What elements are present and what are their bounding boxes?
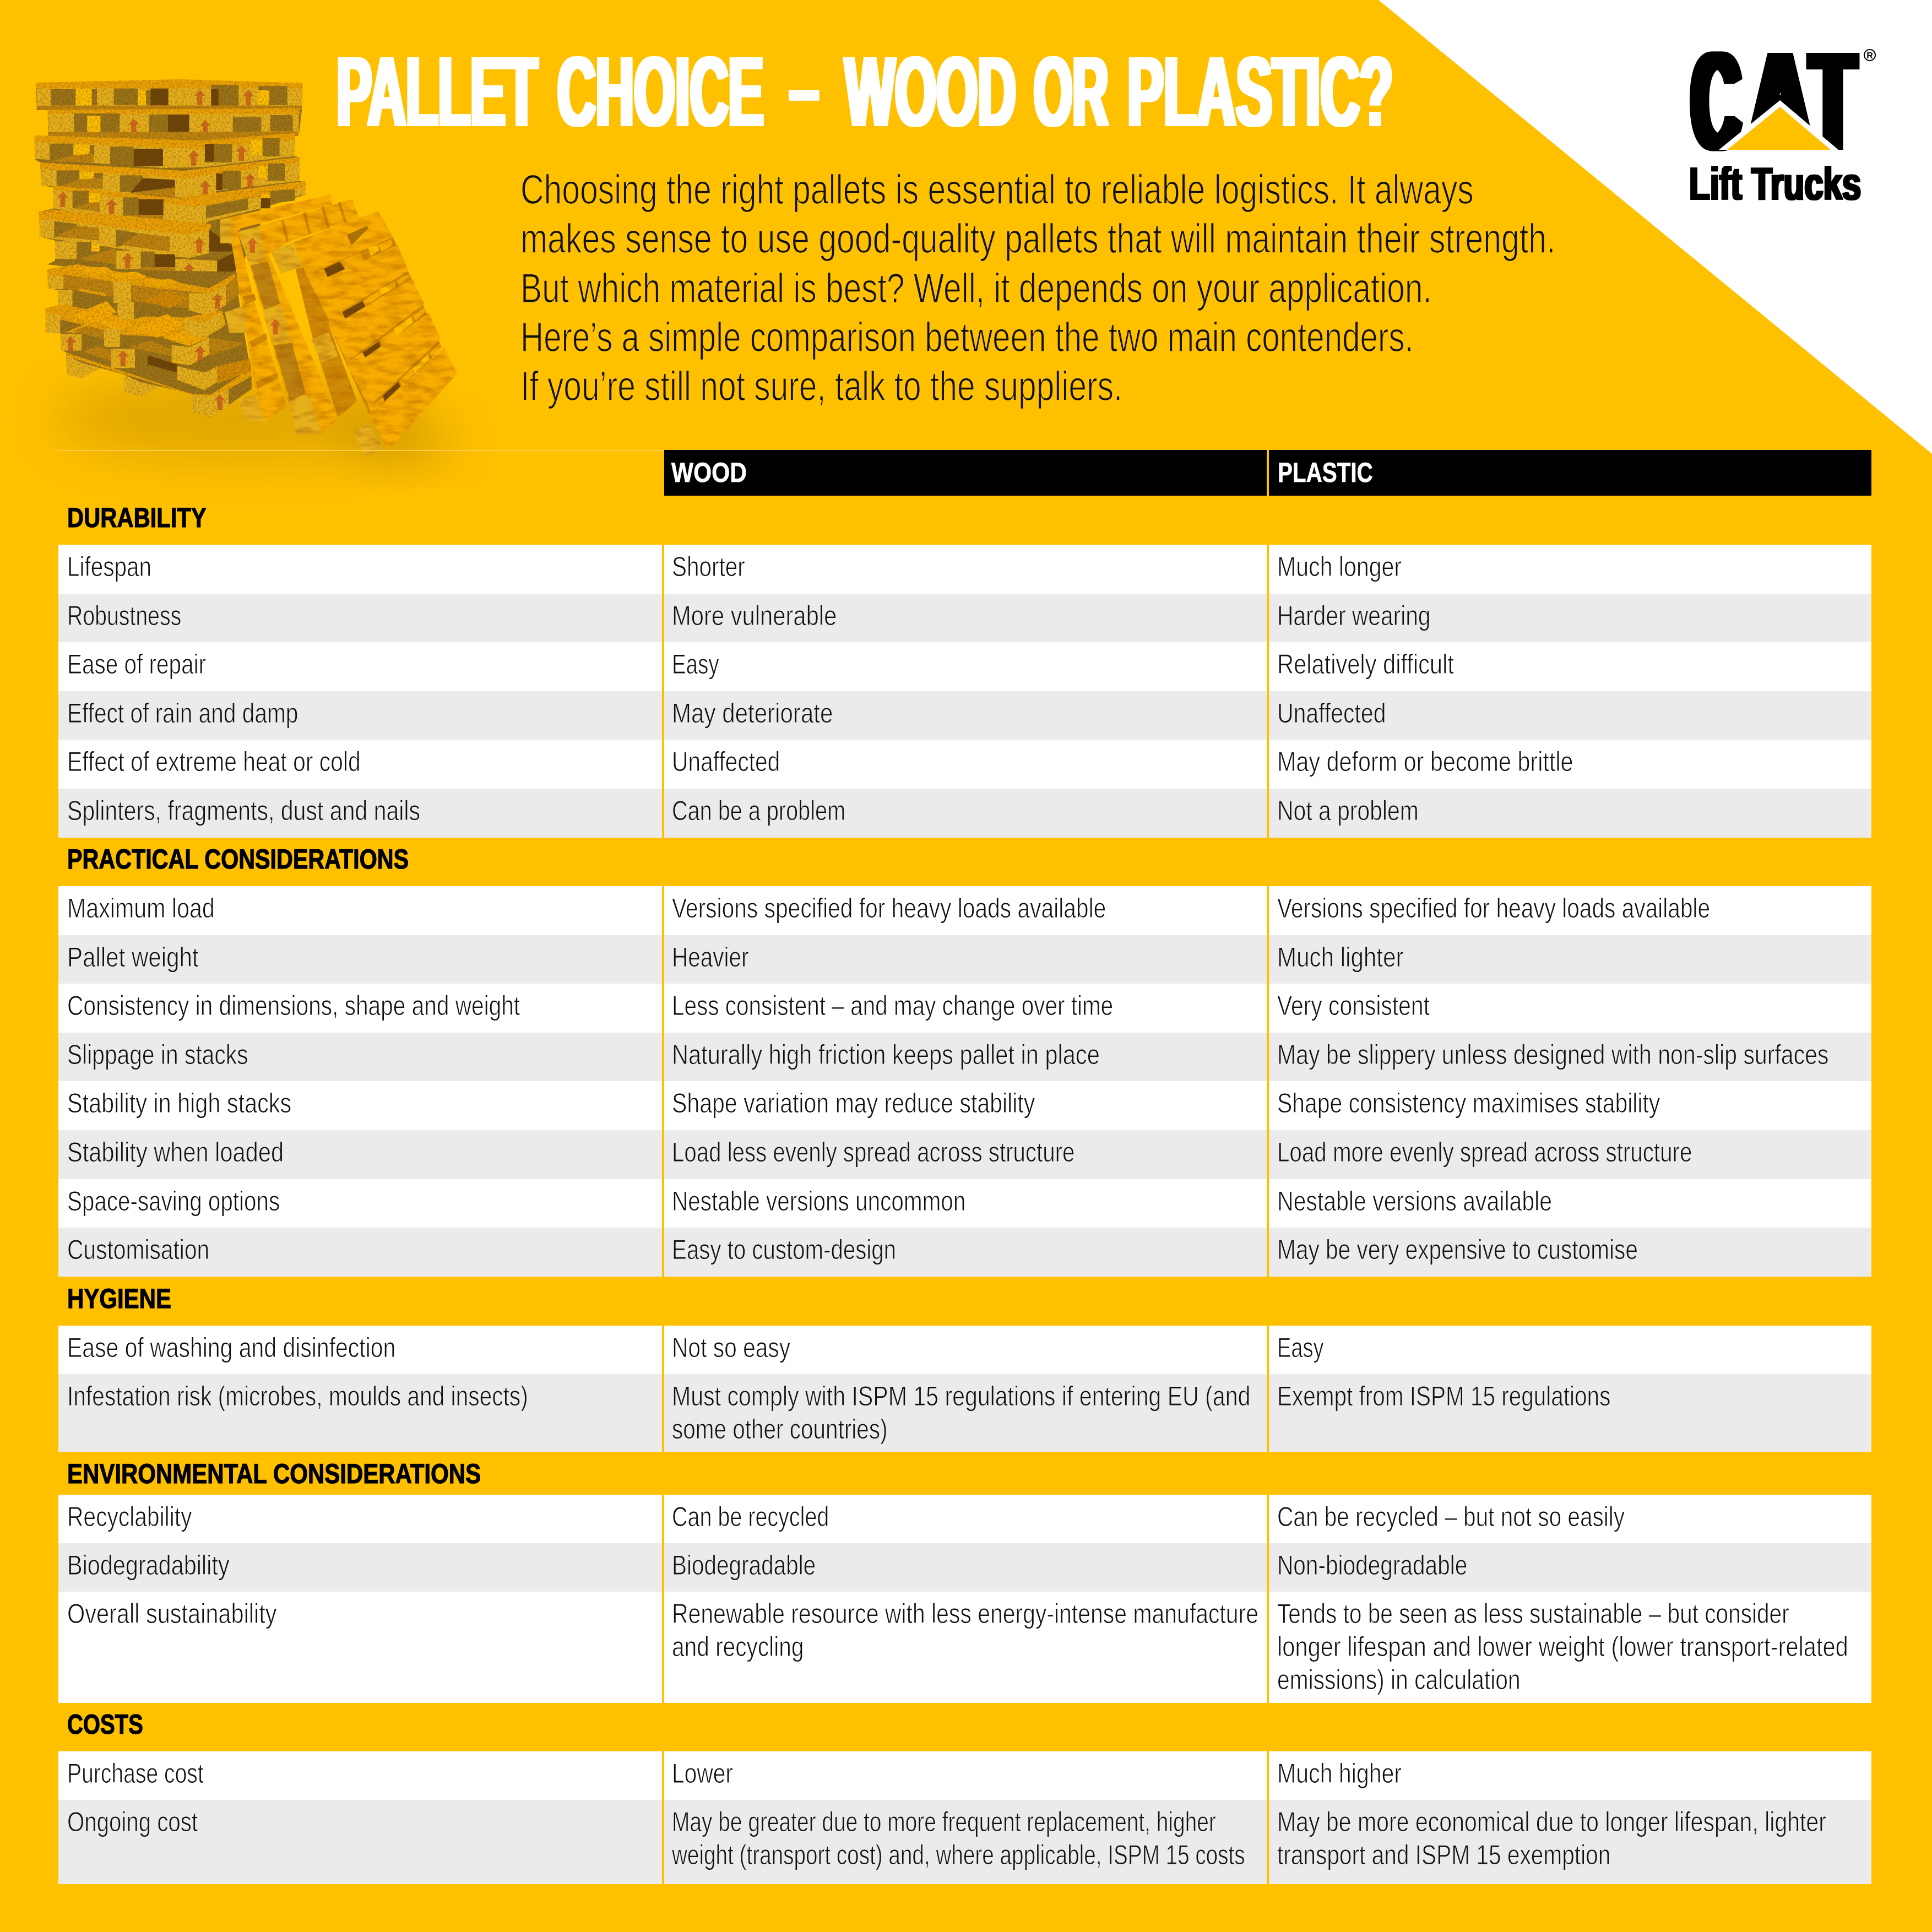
row: pallet weight: Heavier (672, 942, 749, 973)
row: stability in high stacks: Shape consistency maximises stability (1277, 1088, 1660, 1119)
row: effect of rain and damp (58, 691, 1871, 740)
row: overall sustainability: Renewable resource with less energy-intense manufacture (672, 1598, 1258, 1629)
row: ongoing cost: transport and ISPM 15 exemption (1277, 1839, 1610, 1870)
intro text: Here’s a simple comparison between the two main contenders. (520, 314, 1414, 361)
title: PLASTIC? (1127, 36, 1393, 146)
row: ongoing cost: weight (transport cost) and, where applicable, ISPM 15 costs (671, 1840, 1245, 1870)
row: ease of repair: Relatively difficult (1277, 648, 1454, 680)
row: robustness (58, 594, 1871, 642)
row: effect of extreme heat or cold: Effect of extreme heat or cold (67, 746, 361, 777)
row: slippage in stacks: May be slippery unless designed with non-slip surfaces (1277, 1039, 1828, 1070)
row: robustness: More vulnerable (672, 600, 837, 631)
title: – (789, 33, 819, 143)
row: stability when loaded: Load less evenly spread across structure (672, 1137, 1074, 1168)
row: lifespan: Much longer (1277, 551, 1402, 582)
row: maximum load (58, 886, 1871, 935)
row: effect of rain and damp: May deteriorate (672, 698, 833, 729)
intro text (520, 167, 1555, 410)
white corner triangle (1379, 0, 1932, 454)
row: ease of washing: Ease of washing and disinfection (67, 1332, 395, 1363)
title: OR (1034, 37, 1108, 147)
row: ongoing cost: May be greater due to more frequent replacement, higher (672, 1806, 1216, 1837)
row: effect of extreme heat or cold (58, 740, 1871, 789)
row: effect of rain and damp: Unaffected (1277, 698, 1386, 729)
row: pallet weight (58, 935, 1871, 984)
row: purchase cost (58, 1751, 1871, 1800)
row: infestation risk: Infestation risk (microbes, moulds and insects) (67, 1381, 528, 1412)
row: space-saving options: Space-saving options (67, 1186, 280, 1217)
intro text: But which material is best? Well, it depends on your application. (520, 265, 1432, 312)
row: consistency: Consistency in dimensions, shape and weight (67, 990, 520, 1021)
row: consistency: Less consistent – and may change over time (672, 990, 1113, 1021)
row: effect of extreme heat or cold: May deform or become brittle (1277, 746, 1573, 777)
intro text: Choosing the right pallets is essential to reliable logistics. It always (520, 167, 1474, 213)
row: overall sustainability: longer lifespan and lower weight (lower transport-related (1277, 1631, 1848, 1662)
title: WOOD (845, 37, 1016, 147)
title: PALLET (337, 37, 538, 147)
row: pallet weight: Much lighter (1277, 942, 1404, 973)
logo: Cat Lift Trucks: T (1810, 23, 1855, 179)
section heading: durability: DURABILITY (67, 502, 207, 533)
row: lifespan: Lifespan (67, 551, 151, 582)
row: ongoing cost: Ongoing cost (67, 1806, 198, 1837)
row: purchase cost: Much higher (1277, 1758, 1402, 1789)
intro text: If you’re still not sure, talk to the suppliers. (520, 363, 1122, 410)
row: biodegradability: Non-biodegradable (1277, 1550, 1467, 1581)
row: robustness: Robustness (67, 600, 181, 631)
row: customisation: Customisation (67, 1234, 209, 1265)
row: consistency: Very consistent (1277, 990, 1430, 1021)
row: customisation: Easy to custom-design (672, 1234, 896, 1265)
row: ease of washing: Not so easy (672, 1332, 790, 1363)
row: recyclability (58, 1495, 1871, 1543)
row: space-saving options: Nestable versions uncommon (672, 1186, 965, 1217)
row: lifespan (58, 545, 1871, 594)
table header: wood (664, 450, 1267, 496)
row: space-saving options: Nestable versions available (1277, 1186, 1552, 1217)
row: slippage in stacks: Slippage in stacks (67, 1039, 248, 1070)
row: stability in high stacks (58, 1081, 1871, 1130)
row: ease of washing (58, 1326, 1871, 1374)
row: stability when loaded: Stability when loaded (67, 1136, 284, 1168)
row: ease of repair (58, 642, 1871, 691)
row: biodegradability (58, 1543, 1871, 1592)
table header: plastic (1269, 450, 1871, 496)
row: overall sustainability (58, 1592, 1871, 1703)
row: ongoing cost: May be more economical due to longer lifespan, lighter (1277, 1806, 1826, 1837)
row: customisation: May be very expensive to customise (1277, 1234, 1638, 1265)
row: robustness: Harder wearing (1277, 600, 1431, 631)
row: recyclability: Recyclability (67, 1501, 192, 1532)
row: stability when loaded (58, 1130, 1871, 1179)
row: stability when loaded: Load more evenly spread across structure (1277, 1137, 1692, 1168)
row: overall sustainability: emissions) in calculation (1277, 1664, 1521, 1695)
row: stability in high stacks: Shape variation may reduce stability (672, 1088, 1035, 1119)
row: recyclability: Can be recycled – but not so easily (1277, 1501, 1625, 1532)
row: infestation risk: some other countries) (672, 1414, 888, 1445)
front leaning (307, 237, 442, 416)
row: ease of washing: Easy (1277, 1333, 1324, 1363)
row: slippage in stacks: Naturally high friction keeps pallet in place (672, 1039, 1100, 1070)
row: overall sustainability: and recycling (672, 1631, 804, 1662)
row: purchase cost: Purchase cost (67, 1757, 204, 1789)
row: splinters: Not a problem (1277, 795, 1419, 826)
row: overall sustainability: Overall sustainability (67, 1598, 277, 1629)
row: purchase cost: Lower (672, 1758, 733, 1789)
table header: wood: WOOD (671, 457, 747, 488)
row: pallet weight: Pallet weight (67, 942, 199, 973)
row: stability in high stacks: Stability in high stacks (67, 1087, 291, 1119)
row: effect of extreme heat or cold: Unaffected (672, 746, 780, 777)
faint image edge line (58, 450, 664, 451)
row: splinters: Can be a problem (672, 795, 845, 826)
row: effect of rain and damp: Effect of rain and damp (67, 698, 298, 729)
row: biodegradability: Biodegradability (67, 1549, 230, 1581)
row: maximum load: Maximum load (67, 893, 215, 924)
back leaning (232, 231, 286, 422)
row: customisation (58, 1228, 1871, 1277)
row: maximum load: Versions specified for heavy loads available (672, 893, 1106, 924)
section heading: costs: COSTS (67, 1709, 143, 1740)
row: lifespan: Shorter (672, 551, 745, 582)
row: space-saving options (58, 1179, 1871, 1228)
row: consistency (58, 984, 1871, 1033)
logo: Cat Lift Trucks: C (1692, 23, 1740, 179)
row: recyclability: Can be recycled (672, 1501, 829, 1532)
section heading: hygiene: HYGIENE (67, 1283, 171, 1314)
row: infestation risk: Must comply with ISPM 15 regulations if entering EU (and (672, 1381, 1250, 1412)
illustration: stack of wooden pallets (35, 79, 457, 463)
title: CHOICE (557, 37, 764, 147)
row: splinters (58, 789, 1871, 838)
section heading: practical considerations: PRACTICAL CONSIDERATIONS (67, 843, 409, 875)
row: maximum load: Versions specified for heavy loads available (1277, 893, 1710, 924)
row: infestation risk: Exempt from ISPM 15 regulations (1277, 1381, 1610, 1412)
row: infestation risk (58, 1374, 1871, 1452)
row: ease of repair: Easy (672, 649, 719, 680)
logo: Cat Lift Trucks (1689, 23, 1875, 209)
row: slippage in stacks (58, 1033, 1871, 1081)
intro text: makes sense to use good-quality pallets that will maintain their strength. (520, 216, 1555, 262)
section heading: environmental considerations: ENVIRONMENTAL CONSIDERATIONS (67, 1458, 481, 1489)
row: ease of repair: Ease of repair (67, 649, 206, 680)
row: biodegradability: Biodegradable (672, 1550, 816, 1581)
row: splinters: Splinters, fragments, dust and nails (67, 795, 420, 826)
row: ongoing cost (58, 1800, 1871, 1884)
logo: Cat Lift Trucks: R (1866, 51, 1873, 61)
table header: plastic: PLASTIC (1278, 457, 1373, 488)
row: overall sustainability: Tends to be seen as less sustainable – but consider (1277, 1598, 1789, 1629)
logo: Cat Lift Trucks: Lift Trucks (1689, 158, 1861, 209)
logo: Cat Lift Trucks: A (1748, 24, 1813, 180)
title (337, 33, 1393, 147)
middle leaning (296, 266, 357, 417)
